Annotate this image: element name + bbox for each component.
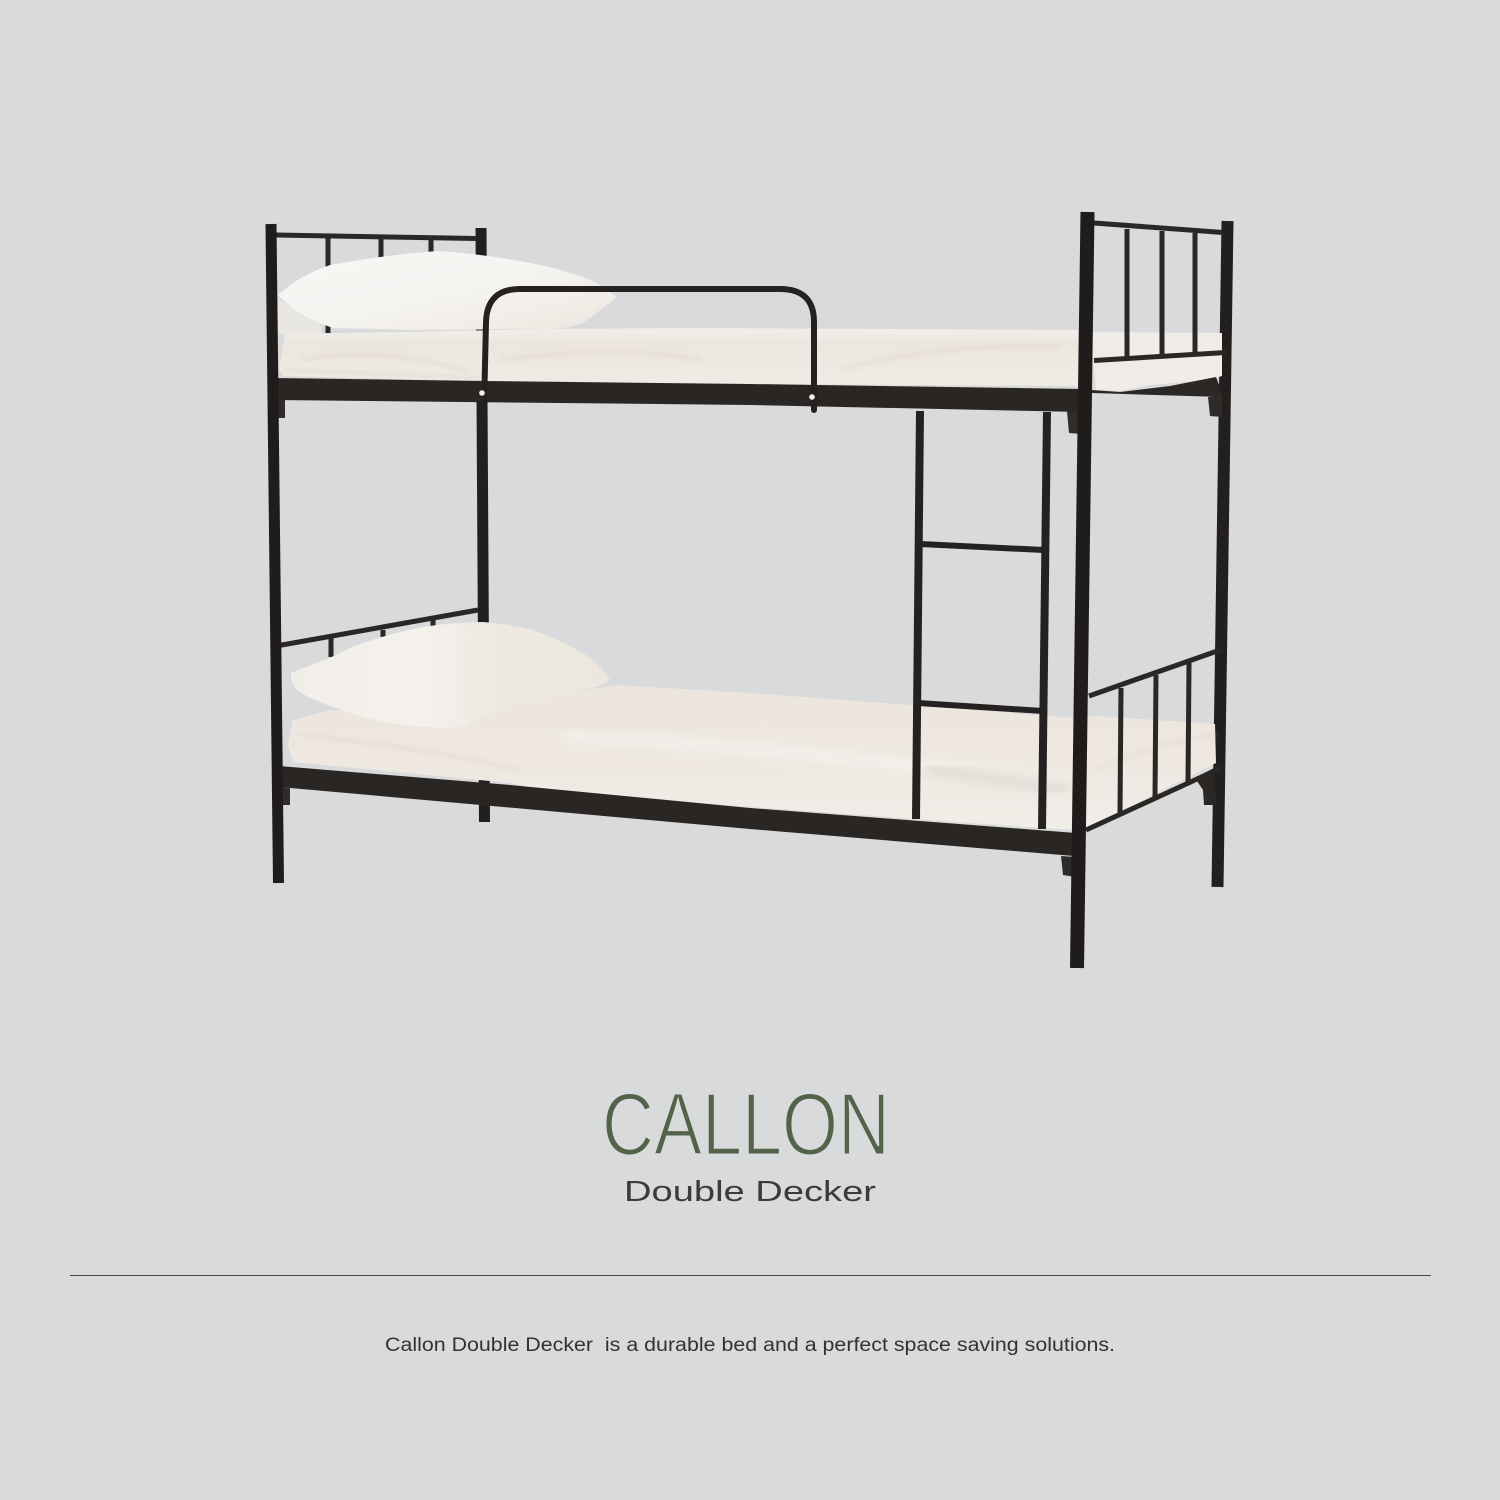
lower headboard, left bbox=[279, 610, 478, 657]
front left post bbox=[271, 224, 278, 883]
divider bbox=[70, 1274, 1431, 1276]
upper left pale mattress end bbox=[278, 300, 322, 334]
lower mattress shading bbox=[300, 735, 1215, 790]
ladder bbox=[916, 411, 1047, 829]
lower mattress bbox=[288, 685, 1216, 830]
upper mattress folds bbox=[285, 345, 1060, 378]
upper pillow bbox=[278, 251, 617, 330]
guard rail bbox=[484, 289, 814, 410]
upper middle bracket bbox=[1067, 411, 1082, 434]
upper mattress bbox=[279, 328, 1078, 386]
back right post bbox=[1218, 221, 1228, 887]
lower right under-frame and bracket bbox=[1195, 768, 1216, 805]
upper under-frame, right end bbox=[1092, 377, 1222, 397]
product name: CALLON bbox=[602, 1074, 890, 1174]
subtitle: Double Decker bbox=[624, 1176, 876, 1208]
upper headboard, left bbox=[276, 235, 477, 333]
guard rail bolts bbox=[479, 390, 815, 400]
lower side rail bbox=[279, 766, 1076, 856]
back left post bbox=[481, 228, 484, 822]
description: Callon Double Decker is a durable bed and a perfect space saving solutions. bbox=[385, 1335, 1115, 1356]
lower footboard, right bbox=[1086, 649, 1223, 830]
upper mattress end behind rails bbox=[1090, 332, 1222, 391]
upper footboard, right bbox=[1094, 223, 1226, 360]
front right post bbox=[1077, 212, 1088, 968]
upper side rail bbox=[274, 378, 1082, 412]
lower pillow bbox=[291, 622, 610, 728]
upper left bracket bbox=[272, 399, 285, 418]
bunk bed bbox=[271, 212, 1228, 968]
lower middle bracket bbox=[1061, 856, 1076, 877]
lower left bracket bbox=[279, 787, 290, 805]
upper right bracket bbox=[1208, 396, 1222, 417]
